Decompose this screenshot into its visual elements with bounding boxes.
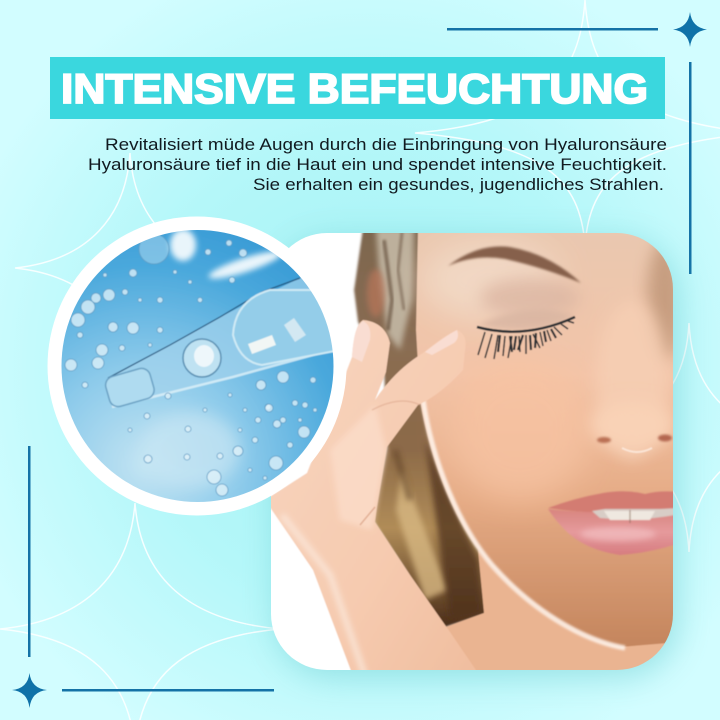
bottom accent line bbox=[62, 689, 274, 692]
icon: top sparkle bbox=[673, 12, 707, 47]
right accent line bbox=[689, 62, 692, 274]
bubbles bbox=[65, 234, 322, 496]
eyebrow bbox=[448, 246, 581, 283]
nose bbox=[590, 300, 674, 460]
cloud highlights bbox=[170, 229, 283, 283]
description text: Revitalisiert müde Augen durch die Einbringung von Hyaluronsäure bbox=[105, 136, 667, 154]
hand bbox=[265, 320, 480, 676]
lips bbox=[548, 491, 680, 555]
description text: Sie erhalten ein gesundes, jugendliches Strahlen. bbox=[253, 176, 664, 194]
photo shadow bbox=[276, 240, 678, 677]
description text: Hyaluronsäure tief in die Haut ein und spendet intensive Feuchtigkeit. bbox=[88, 156, 667, 174]
eye lashes bbox=[477, 317, 575, 359]
icon: bottom sparkle bbox=[12, 673, 47, 708]
neck bbox=[446, 550, 665, 670]
title: INTENSIVE BEFEUCHTUNG bbox=[61, 65, 648, 112]
panel: serum circle bbox=[48, 216, 346, 516]
dropper bbox=[103, 272, 340, 409]
hair bbox=[354, 228, 488, 628]
description text bbox=[88, 136, 667, 194]
eyelid shadow bbox=[484, 312, 569, 330]
left accent line bbox=[28, 446, 30, 657]
panel: face photo bbox=[265, 228, 683, 676]
top accent line bbox=[447, 28, 658, 30]
title banner bbox=[50, 57, 665, 119]
face bbox=[416, 228, 683, 648]
